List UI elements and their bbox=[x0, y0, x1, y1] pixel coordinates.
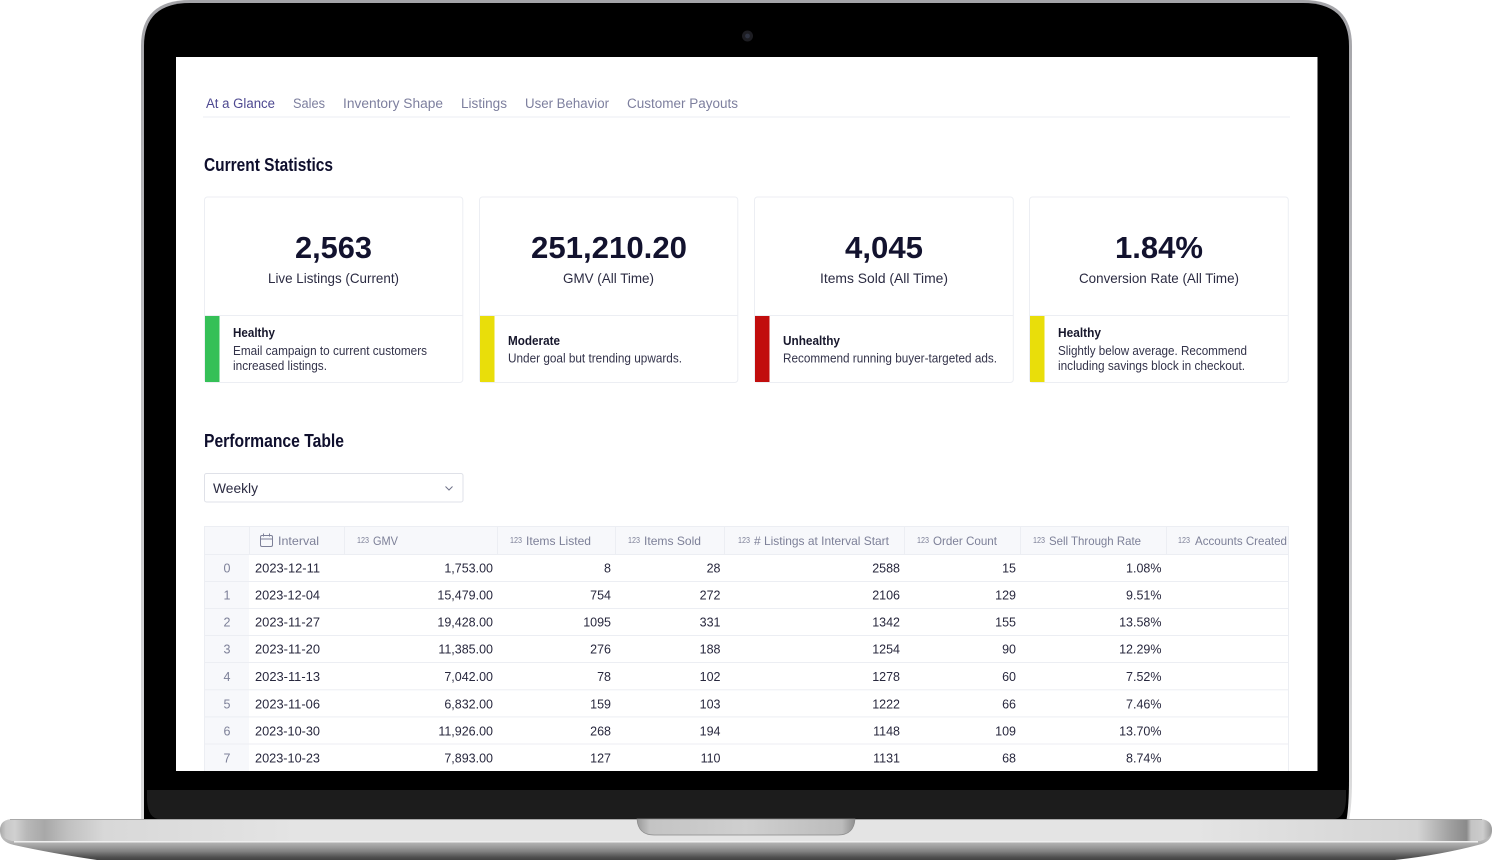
laptop opening notch bbox=[637, 819, 855, 835]
table row 3: 11,385.00 bbox=[438, 642, 493, 656]
laptop base bbox=[0, 819, 1492, 860]
table row 0: 0 bbox=[224, 562, 231, 576]
table row 5: 66 bbox=[1002, 697, 1016, 711]
table row 0: 8 bbox=[604, 562, 611, 576]
table row 5: 1222 bbox=[872, 697, 900, 711]
panel: GMV card: Moderate bbox=[508, 334, 560, 348]
table row 1: 15,479.00 bbox=[437, 588, 493, 602]
table row 3: 188 bbox=[700, 642, 721, 656]
table row 4: 7.52% bbox=[1126, 670, 1162, 684]
table row 7: 7 bbox=[224, 752, 231, 766]
table row 0: 1,753.00 bbox=[444, 562, 493, 576]
panel: GMV card bbox=[480, 197, 738, 382]
panel: items sold card bbox=[754, 197, 1013, 382]
table row 7: 7,893.00 bbox=[444, 752, 493, 766]
panel: conversion rate card: Healthy bbox=[1058, 326, 1101, 340]
table row 2: 13.58% bbox=[1119, 616, 1162, 630]
table row 0: 2588 bbox=[872, 562, 900, 576]
table header row: 123 bbox=[628, 536, 640, 545]
table row 4: 1278 bbox=[872, 670, 900, 684]
panel: GMV card: Under goal but trending upwards. bbox=[508, 352, 682, 366]
table row 7 bbox=[224, 750, 1162, 766]
table row 0 bbox=[224, 560, 1162, 576]
panel: conversion rate card bbox=[1030, 197, 1288, 382]
panel: live listings card: Healthy bbox=[233, 326, 275, 340]
heading: current statistics: Current Statistics bbox=[204, 155, 333, 175]
icon: webcam bbox=[742, 30, 753, 42]
table header row: Order Count bbox=[933, 534, 998, 548]
performance data table bbox=[204, 526, 1289, 771]
interval dropdown bbox=[204, 474, 463, 502]
table row 4 bbox=[224, 669, 1162, 684]
table row 7: 8.74% bbox=[1126, 752, 1162, 766]
table row 7: 110 bbox=[701, 752, 721, 766]
table header row: 123 bbox=[1178, 536, 1190, 545]
table row 5: 7.46% bbox=[1126, 697, 1162, 711]
table header row: Items Sold bbox=[644, 534, 701, 548]
table header row: 123 bbox=[1033, 536, 1045, 545]
table row 2: 155 bbox=[995, 616, 1016, 630]
table row 6: 194 bbox=[700, 724, 721, 738]
table row 5 bbox=[224, 696, 1162, 711]
table row 2: 2023-11-27 bbox=[255, 614, 320, 630]
panel: items sold card: Recommend running buyer-targeted ads. bbox=[783, 352, 997, 366]
table row 2: 19,428.00 bbox=[437, 616, 493, 630]
table header row: Interval bbox=[278, 534, 319, 548]
table row 3: 2023-11-20 bbox=[255, 642, 320, 656]
heading: performance table: Performance Table bbox=[204, 431, 344, 451]
table row 4: 102 bbox=[700, 670, 721, 684]
table row 3: 3 bbox=[224, 642, 231, 656]
table row 2 bbox=[224, 614, 1162, 630]
table row 4: 7,042.00 bbox=[444, 670, 493, 684]
table row 2: 1342 bbox=[872, 616, 900, 630]
table row 4: 78 bbox=[597, 670, 611, 684]
table header row: 123 bbox=[917, 536, 929, 545]
table header row bbox=[204, 526, 1289, 771]
table row 7: 2023-10-23 bbox=[255, 750, 320, 766]
table row 0: 2023-12-11 bbox=[255, 560, 320, 576]
table row 6: 109 bbox=[995, 724, 1016, 738]
table row 3: 1254 bbox=[872, 642, 900, 656]
table header row: 123 bbox=[510, 536, 522, 545]
table header row: Items Listed bbox=[526, 534, 591, 548]
panel: live listings card: Live Listings (Current) bbox=[268, 270, 399, 286]
table row 5: 2023-11-06 bbox=[255, 696, 320, 711]
table row 5: 103 bbox=[700, 697, 721, 711]
table row 6: 1148 bbox=[873, 724, 900, 738]
table row 7: 1131 bbox=[873, 752, 900, 766]
table row 6: 13.70% bbox=[1119, 724, 1162, 738]
table row 4: 4 bbox=[224, 670, 231, 684]
table row 0: 28 bbox=[707, 562, 721, 576]
table row 2: 1095 bbox=[583, 616, 611, 630]
panel: conversion rate card: Slightly below average. Recommend bbox=[1058, 344, 1247, 358]
panel: GMV card: GMV (All Time) bbox=[563, 270, 654, 286]
panel: GMV card: 251,210.20 bbox=[531, 230, 687, 265]
panel: conversion rate card: 1.84% bbox=[1115, 230, 1203, 265]
screen bbox=[176, 57, 1318, 771]
table row 3: 90 bbox=[1002, 642, 1016, 656]
panel: items sold card: 4,045 bbox=[845, 230, 923, 265]
table row 2: 2 bbox=[224, 616, 231, 630]
table row 6: 6 bbox=[224, 724, 231, 738]
table row 1 bbox=[224, 588, 1162, 602]
table row 1: 2106 bbox=[872, 588, 900, 602]
navigation tabs: Listings bbox=[461, 96, 507, 111]
table row 1: 129 bbox=[995, 588, 1016, 602]
panel: live listings card: Email campaign to current customers bbox=[233, 344, 427, 358]
panel: live listings card: increased listings. bbox=[233, 359, 327, 373]
table row 6 bbox=[224, 723, 1162, 738]
table header row: 123 bbox=[738, 536, 750, 545]
navigation tabs: At a Glance bbox=[206, 96, 275, 111]
table row 1: 2023-12-04 bbox=[255, 588, 320, 602]
icon: calendar bbox=[260, 534, 272, 546]
navigation tabs: Sales bbox=[293, 96, 325, 111]
table row 3: 12.29% bbox=[1119, 642, 1162, 656]
table row 3 bbox=[224, 642, 1162, 656]
table row 4: 2023-11-13 bbox=[255, 669, 320, 684]
panel: items sold card: Items Sold (All Time) bbox=[820, 270, 948, 286]
table row 5: 6,832.00 bbox=[444, 697, 493, 711]
table header row: # Listings at Interval Start bbox=[754, 534, 890, 548]
table row 1: 1 bbox=[224, 588, 231, 602]
panel: conversion rate card: Conversion Rate (All Time) bbox=[1079, 270, 1239, 286]
table row 2: 331 bbox=[700, 616, 721, 630]
table row 1: 272 bbox=[700, 588, 721, 602]
interval dropdown: Weekly bbox=[213, 480, 258, 496]
table row 1: 754 bbox=[590, 588, 611, 602]
panel: items sold card: Unhealthy bbox=[783, 334, 840, 348]
panel: live listings card: 2,563 bbox=[295, 230, 372, 265]
navigation tabs: User Behavior bbox=[525, 96, 609, 111]
panel: live listings card bbox=[204, 197, 463, 382]
table row 6: 268 bbox=[590, 724, 611, 738]
table row 1: 9.51% bbox=[1126, 588, 1162, 602]
table row 5: 159 bbox=[590, 697, 611, 711]
laptop lid bbox=[141, 0, 1352, 820]
table header row: Sell Through Rate bbox=[1049, 534, 1141, 548]
table row 4: 60 bbox=[1002, 670, 1016, 684]
table row 3: 276 bbox=[590, 642, 611, 656]
navigation tabs bbox=[203, 96, 1290, 118]
table header row: GMV bbox=[373, 534, 398, 548]
table row 7: 68 bbox=[1002, 752, 1016, 766]
table row 0: 1.08% bbox=[1126, 562, 1162, 576]
table row 5: 5 bbox=[224, 697, 231, 711]
navigation tabs: Inventory Shape bbox=[343, 96, 443, 111]
table row 6: 11,926.00 bbox=[438, 724, 493, 738]
table row 0: 15 bbox=[1002, 562, 1016, 576]
table header row: Accounts Created bbox=[1195, 534, 1287, 548]
table header row: 123 bbox=[357, 536, 369, 545]
navigation tabs: Customer Payouts bbox=[627, 96, 738, 111]
panel: conversion rate card: including savings block in checkout. bbox=[1058, 359, 1245, 373]
table row 6: 2023-10-30 bbox=[255, 723, 320, 738]
table row 7: 127 bbox=[590, 752, 611, 766]
